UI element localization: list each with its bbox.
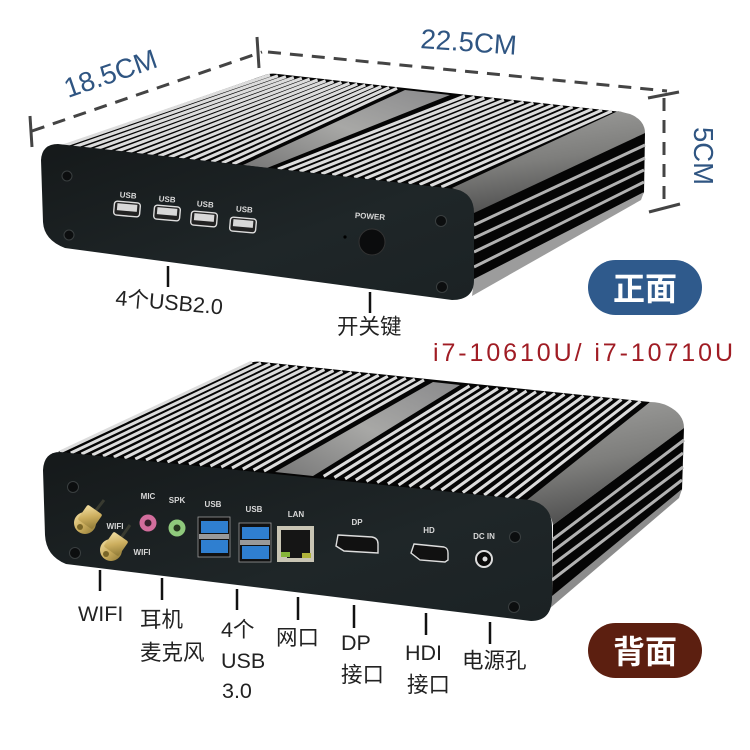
- label: WIFI: WIFI: [78, 602, 123, 626]
- label: 4 USB 3.0: [221, 589, 265, 703]
- DC IN jack: [473, 532, 495, 567]
- label: HDI port: HDI: [405, 641, 442, 665]
- badge: front: 正面: [613, 271, 677, 307]
- label: HDI port: 接口: [407, 673, 450, 697]
- MIC and SPK jacks: SPK: [169, 496, 185, 505]
- WIFI antenna connectors: [74, 500, 150, 561]
- dimension label: 18.5CM: 18.5CM: [60, 43, 161, 104]
- dimension lines: height 5CM: [649, 98, 680, 212]
- USB 2.0 ports: USB: [236, 204, 253, 215]
- label: 4 USB2.0: [115, 266, 224, 319]
- label: power jack: 电源孔: [462, 649, 527, 673]
- heat-sink top fins: [58, 362, 650, 504]
- LAN port: [277, 510, 314, 562]
- HD port: [411, 526, 448, 562]
- label: 4 USB 3.0: 3.0: [222, 679, 252, 703]
- label: HDI port: [405, 613, 450, 697]
- device: front view: [41, 74, 645, 300]
- right side fins: [472, 133, 645, 296]
- badge: front: [588, 260, 702, 315]
- label: power key: [337, 292, 402, 339]
- centre bar: [243, 90, 450, 168]
- screws: [68, 482, 520, 612]
- badge: back: [588, 623, 702, 678]
- WIFI antenna connectors: WIFI: [134, 548, 150, 557]
- USB 3.0 ports: USB: [246, 505, 263, 514]
- centre bar: [275, 382, 460, 476]
- label: earphone and microphone: 耳机: [140, 608, 184, 632]
- DP port: DP: [351, 518, 363, 527]
- label: WIFI: [78, 570, 123, 626]
- label: network port: 网口: [276, 626, 319, 650]
- MIC and SPK jacks: MIC: [141, 492, 156, 501]
- right rounded edge: [527, 402, 684, 525]
- HD port: HD: [423, 526, 435, 535]
- USB 2.0 ports: USB: [119, 190, 137, 201]
- rear face: [43, 452, 552, 621]
- USB 3.0 ports: USB: [205, 500, 222, 509]
- heat-sink top fins: [60, 74, 622, 192]
- screws: [62, 171, 448, 292]
- LAN port: LAN: [288, 510, 304, 519]
- dimension label: 22.5CM: 22.5CM: [420, 23, 518, 61]
- dimension lines: depth 18.5CM: [30, 37, 262, 147]
- label: power key: 开关键: [337, 315, 402, 339]
- USB 2.0 ports: [113, 190, 258, 233]
- label: earphone and microphone: [140, 578, 205, 665]
- USB 2.0 ports: USB: [196, 199, 214, 210]
- label: DP port: DP: [341, 631, 371, 655]
- power button: [343, 211, 386, 255]
- label: power jack: [462, 622, 527, 673]
- USB 3.0 ports: [198, 500, 271, 562]
- power button: POWER: [355, 211, 386, 222]
- label: 4 USB2.0: 4个USB2.0: [115, 286, 224, 319]
- DP port: [336, 518, 378, 553]
- badge: back: 背面: [613, 634, 677, 670]
- WIFI antenna connectors: WIFI: [107, 522, 123, 531]
- label: 4 USB 3.0: 4个: [221, 618, 254, 642]
- USB 2.0 ports: USB: [158, 194, 176, 205]
- label: network port: [276, 597, 319, 650]
- right rounded edge: [452, 111, 645, 215]
- label: 4 USB 3.0: USB: [221, 649, 265, 673]
- label: DP port: [341, 605, 384, 687]
- MIC and SPK jacks: [140, 492, 186, 536]
- dimension lines: width 22.5CM: [268, 52, 679, 98]
- front face: [41, 144, 474, 300]
- dimension label: 5CM: 5CM: [688, 127, 719, 185]
- label: DP port: 接口: [341, 663, 384, 687]
- device: back view: [43, 362, 684, 621]
- right side fins: [549, 428, 684, 609]
- label: earphone and microphone: 麦克风: [140, 641, 205, 665]
- DC IN jack: DC IN: [473, 532, 495, 541]
- model text: i7-10610U/ i7-10710U: [433, 339, 733, 367]
